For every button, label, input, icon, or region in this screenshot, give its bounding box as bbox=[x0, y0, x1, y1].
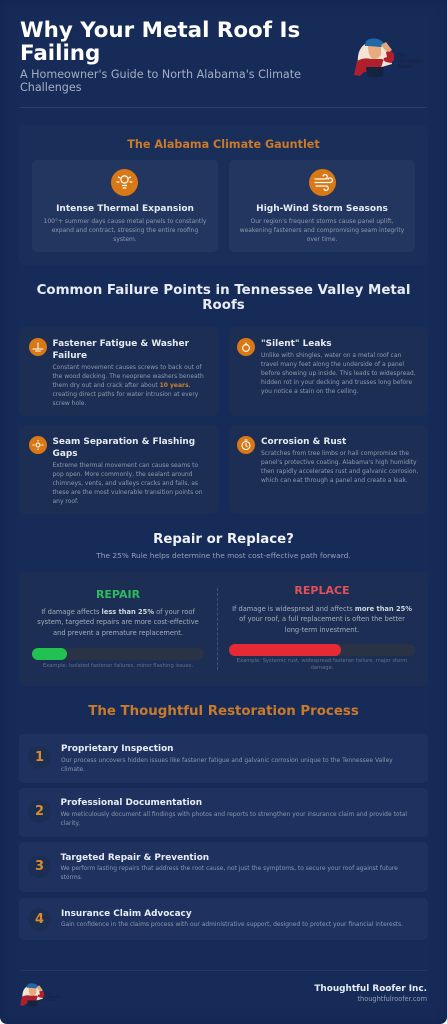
repair title: REPAIR bbox=[96, 588, 140, 600]
heading: failure points: Roofs bbox=[202, 298, 245, 313]
step text bbox=[60, 865, 398, 881]
footer url: thoughtfulroofer.com bbox=[357, 995, 427, 1003]
repair text: and prevent a premature replacement. bbox=[53, 628, 183, 636]
replace example bbox=[237, 658, 407, 671]
step text: storms. bbox=[60, 874, 83, 881]
card title: High-Wind Storm Seasons bbox=[256, 204, 388, 214]
heading: failure points bbox=[37, 283, 410, 313]
card text: travel many feet along the underside of a panel bbox=[261, 360, 404, 368]
step number: 1 bbox=[35, 750, 44, 765]
step 2 bbox=[19, 788, 428, 837]
title: Why Your Metal Roof Is bbox=[20, 18, 300, 43]
card: fastener fatigue bbox=[19, 327, 219, 416]
step text bbox=[61, 756, 393, 772]
step text bbox=[60, 810, 407, 826]
repair text: If damage affects less than 25% of your roof bbox=[41, 608, 195, 616]
card text: any roof. bbox=[52, 498, 79, 504]
step title: Targeted Repair & Prevention bbox=[60, 852, 209, 862]
logo: header bbox=[354, 38, 424, 78]
card text bbox=[52, 462, 203, 504]
card: corrosion bbox=[229, 425, 428, 514]
card text: pop open. More commonly, the sealant around bbox=[52, 470, 192, 478]
card text: these are the most vulnerable transition points on bbox=[52, 488, 203, 496]
heading: restoration process: The Thoughtful Restoration Process bbox=[88, 704, 359, 719]
card: thermal expansion bbox=[32, 160, 218, 252]
subtitle bbox=[20, 68, 301, 94]
card title bbox=[52, 436, 195, 458]
card text: Constant movement causes screws to back out of bbox=[52, 364, 202, 370]
step text: Our process uncovers hidden issues like fastener fatigue and galvanic corrosion unique to the Tennessee Valley bbox=[61, 756, 393, 764]
step number: 4 bbox=[35, 912, 44, 926]
icon: sun bulb bbox=[111, 169, 138, 196]
icon: wind bbox=[308, 169, 336, 196]
card text: Scratches from tree limbs or hail compromise the bbox=[261, 450, 409, 456]
card: seam separation bbox=[19, 425, 219, 514]
replace bar bbox=[229, 644, 415, 656]
logo: header: Roofer bbox=[397, 64, 413, 70]
heading: failure points: Common Failure Points in Tennessee Valley Metal bbox=[37, 283, 410, 298]
subheading: 25% rule: The 25% Rule helps determine the most cost-effective path forward. bbox=[96, 550, 351, 560]
footer company name: Thoughtful Roofer Inc. bbox=[314, 984, 427, 994]
logo: header: The bbox=[397, 53, 406, 59]
card text: hidden rot in your decking and trusses long before bbox=[261, 378, 412, 386]
heading: climate gauntlet: The Alabama Climate Gauntlet bbox=[127, 138, 320, 150]
step number bbox=[28, 854, 51, 878]
step number bbox=[28, 908, 51, 930]
step title: Proprietary Inspection bbox=[61, 744, 174, 754]
subtitle: Challenges bbox=[20, 81, 82, 94]
replace title: REPLACE bbox=[294, 584, 350, 596]
card title: Corrosion & Rust bbox=[261, 436, 346, 446]
card title: Intense Thermal Expansion bbox=[56, 204, 194, 214]
step title: Professional Documentation bbox=[60, 798, 202, 808]
card text: the wood decking. The neoprene washers beneath bbox=[52, 372, 204, 380]
title bbox=[20, 18, 300, 66]
title: Failing bbox=[20, 41, 100, 66]
card text: then rapidly accelerates rust and galvanic corrosion, bbox=[261, 468, 418, 474]
card text: before showing up inside. This leads to widespread, bbox=[261, 370, 416, 376]
logo: footer bbox=[20, 983, 62, 1007]
card text bbox=[261, 450, 418, 484]
card text: Extreme thermal movement can cause seams to bbox=[52, 462, 198, 468]
logo: footer: Thoughtful bbox=[46, 995, 62, 999]
step 4 bbox=[19, 898, 428, 940]
replace text bbox=[232, 604, 412, 634]
card text: expand and contract, stressing the entire roofing bbox=[52, 226, 198, 234]
step text: Gain confidence in the claims process with our administrative support, designed to protect your financial interests. bbox=[61, 921, 403, 928]
card text: creating direct paths for water intrusion at every bbox=[52, 390, 198, 398]
card title: "Silent" Leaks bbox=[261, 338, 332, 348]
step text: clarity. bbox=[60, 820, 80, 826]
card text: them dry out and crack after about 10 years, bbox=[52, 382, 190, 388]
icon: seam bbox=[29, 436, 47, 454]
repair bar bbox=[32, 648, 204, 660]
panel: climate gauntlet bbox=[19, 125, 428, 265]
card title: Failure bbox=[52, 350, 87, 360]
icon: fastener bbox=[29, 338, 47, 356]
column: replace bbox=[229, 584, 415, 671]
logo: header: Thoughtful bbox=[397, 58, 424, 64]
card text bbox=[261, 352, 416, 394]
card text bbox=[52, 364, 204, 406]
heading: repair or replace: Repair or Replace? bbox=[153, 532, 294, 547]
card text: system. bbox=[113, 236, 137, 242]
panel: repair or replace bbox=[19, 572, 428, 686]
step 1 bbox=[19, 734, 428, 783]
card title: Fastener Fatigue & Washer bbox=[52, 338, 189, 348]
card: silent leaks bbox=[229, 327, 428, 416]
card text bbox=[240, 218, 404, 242]
card text bbox=[44, 218, 206, 242]
card text: over time. bbox=[307, 236, 337, 242]
step number: 2 bbox=[35, 804, 44, 819]
logo: footer: Roofer bbox=[46, 998, 56, 1002]
step text: climate. bbox=[61, 766, 85, 772]
replace text: of your roof, a full replacement is often the better bbox=[239, 615, 405, 623]
repair example: Example: Isolated fastener failures, minor flashing issues. bbox=[43, 662, 193, 668]
card text: panel's protective coating. Alabama's high humidity bbox=[261, 458, 417, 466]
card text: weakening fasteners and compromising seam integrity bbox=[240, 226, 404, 234]
card text: Our region's frequent storms cause panel uplift, bbox=[250, 218, 393, 224]
card text: 100°+ summer days cause metal panels to constantly bbox=[44, 218, 206, 224]
card: wind bbox=[229, 160, 415, 252]
step number bbox=[28, 746, 51, 769]
card text: screw hole. bbox=[52, 400, 86, 406]
step text: We perform lasting repairs that address the root cause, not just the symptoms, to secure your roof against future bbox=[60, 865, 398, 872]
icon: clock bbox=[237, 436, 255, 454]
repair text: system, targeted repairs are more cost-effective bbox=[37, 618, 199, 626]
step text: We meticulously document all findings with photos and reports to strengthen your insurance claim and provide total bbox=[60, 810, 407, 818]
icon: drop bbox=[237, 338, 255, 356]
logo: footer: The bbox=[46, 991, 52, 995]
subtitle: A Homeowner's Guide to North Alabama's Climate bbox=[20, 68, 301, 80]
step number: 3 bbox=[35, 858, 44, 874]
card title: Gaps bbox=[52, 448, 78, 458]
replace example: Example: Systemic rust, widespread fastener failure, major storm bbox=[237, 658, 407, 664]
step number bbox=[28, 800, 51, 823]
replace example: damage. bbox=[311, 665, 333, 671]
repair text bbox=[37, 608, 199, 636]
step 3 bbox=[19, 842, 428, 892]
card text: which can eat through a panel and create a leak. bbox=[261, 476, 408, 484]
card text: Unlike with shingles, water on a metal roof can bbox=[261, 352, 401, 358]
step title: Insurance Claim Advocacy bbox=[61, 908, 192, 918]
card title: Seam Separation & Flashing bbox=[52, 436, 195, 446]
replace text: long-term investment. bbox=[285, 626, 359, 634]
card title bbox=[52, 338, 189, 360]
card text: you notice a stain on the ceiling. bbox=[261, 388, 359, 394]
column: repair bbox=[32, 588, 204, 668]
card text: chimneys, vents, and valleys cracks and fails, as bbox=[52, 480, 198, 486]
replace text: If damage is widespread and affects more than 25% bbox=[232, 604, 412, 612]
